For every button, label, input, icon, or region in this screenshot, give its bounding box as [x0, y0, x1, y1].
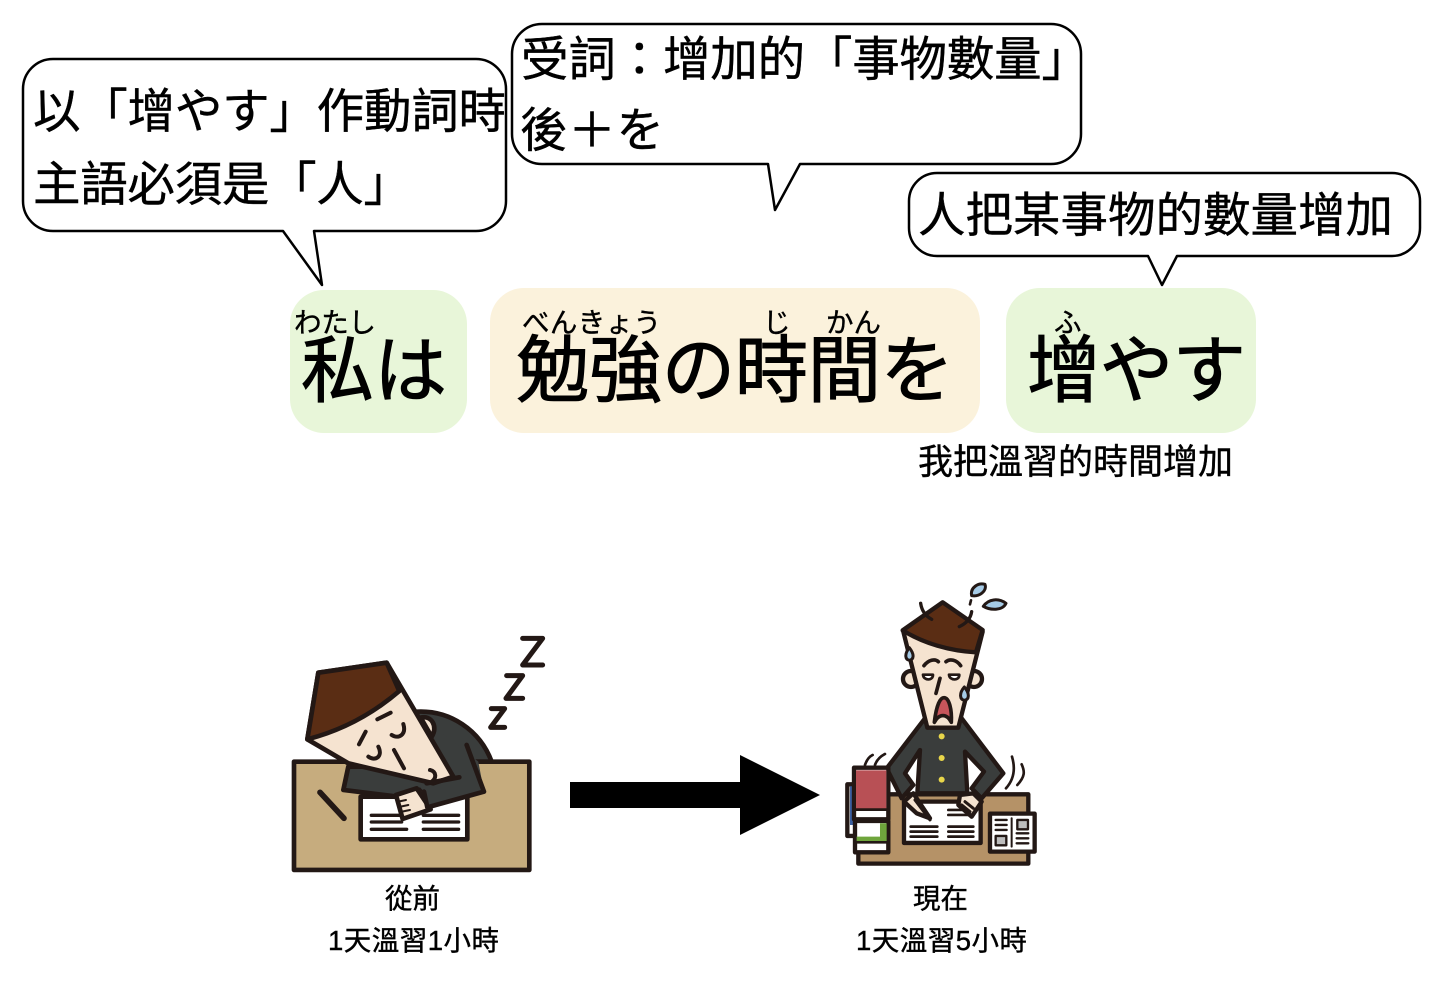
caption: now: 現在: [913, 883, 968, 914]
ears: [903, 671, 919, 687]
body: [887, 718, 1003, 798]
callout: object is the thing increased: [512, 24, 1089, 210]
eyebrows and eyes: [924, 660, 961, 693]
word block: object 勉強の時間を: かん: [826, 307, 881, 338]
word block: object 勉強の時間を: じ: [763, 307, 790, 338]
z letters: [491, 638, 543, 727]
motion lines: [865, 754, 1024, 788]
hand: [396, 788, 431, 819]
hands: [904, 793, 930, 818]
caption: now: 1天溫習5小時: [856, 925, 1027, 956]
callout: subject must be a person: [23, 59, 506, 285]
open book: [361, 797, 467, 839]
callout: meaning of the verb: 人把某事物的數量增加: [918, 190, 1393, 243]
shoulder: [403, 712, 492, 762]
callout: subject must be a person: 以「增やす」作動詞時: [33, 86, 506, 139]
illustration: student studying hard: [847, 584, 1035, 864]
buttons: [939, 733, 945, 739]
head: [903, 632, 983, 728]
hair: [903, 602, 983, 652]
caption: before: [328, 883, 499, 956]
cuff line: [427, 777, 459, 783]
caption: before: 1天溫習1小時: [328, 925, 499, 956]
callout: object is the thing increased: 後＋を: [520, 105, 664, 158]
illustration: student sleeping at desk: [294, 638, 543, 870]
callout: subject must be a person: 主語必須是「人」: [33, 159, 411, 212]
desk: [858, 794, 1028, 864]
open book: [904, 802, 981, 843]
head: [307, 663, 453, 783]
word block: object 勉強の時間を: [490, 288, 980, 433]
word block: subject 私は: [290, 290, 467, 433]
callout: object is the thing increased: 受詞：增加的「事物數量」: [521, 34, 1089, 87]
word block: object 勉強の時間を: 勉強の時間を: [516, 329, 954, 412]
caption: before: 從前: [385, 883, 440, 914]
right sleeve and body: [413, 723, 484, 807]
ear: [421, 717, 434, 737]
word block: verb 增やす: 增やす: [1027, 329, 1246, 412]
mouth: [934, 698, 951, 722]
pencil mark: [320, 792, 344, 818]
word block: object 勉強の時間を: べんきょう: [522, 307, 661, 338]
word block: subject 私は: 私は: [301, 331, 447, 412]
word block: verb 增やす: [1006, 288, 1256, 433]
caption: now: [856, 883, 1027, 956]
sweat drops: [906, 584, 1006, 700]
word block: subject 私は: わたし: [294, 307, 376, 338]
hair: [307, 663, 399, 739]
callout: meaning of the verb: [909, 173, 1420, 285]
word block: verb 增やす: ふ: [1054, 307, 1082, 338]
sentence translation: 我把溫習的時間增加: [918, 443, 1233, 482]
arrow: before to after: [570, 755, 820, 835]
desk: [294, 762, 529, 870]
face: [359, 713, 435, 782]
stack of books: [847, 768, 888, 852]
newspaper: [990, 814, 1035, 852]
left sleeve: [343, 767, 430, 797]
